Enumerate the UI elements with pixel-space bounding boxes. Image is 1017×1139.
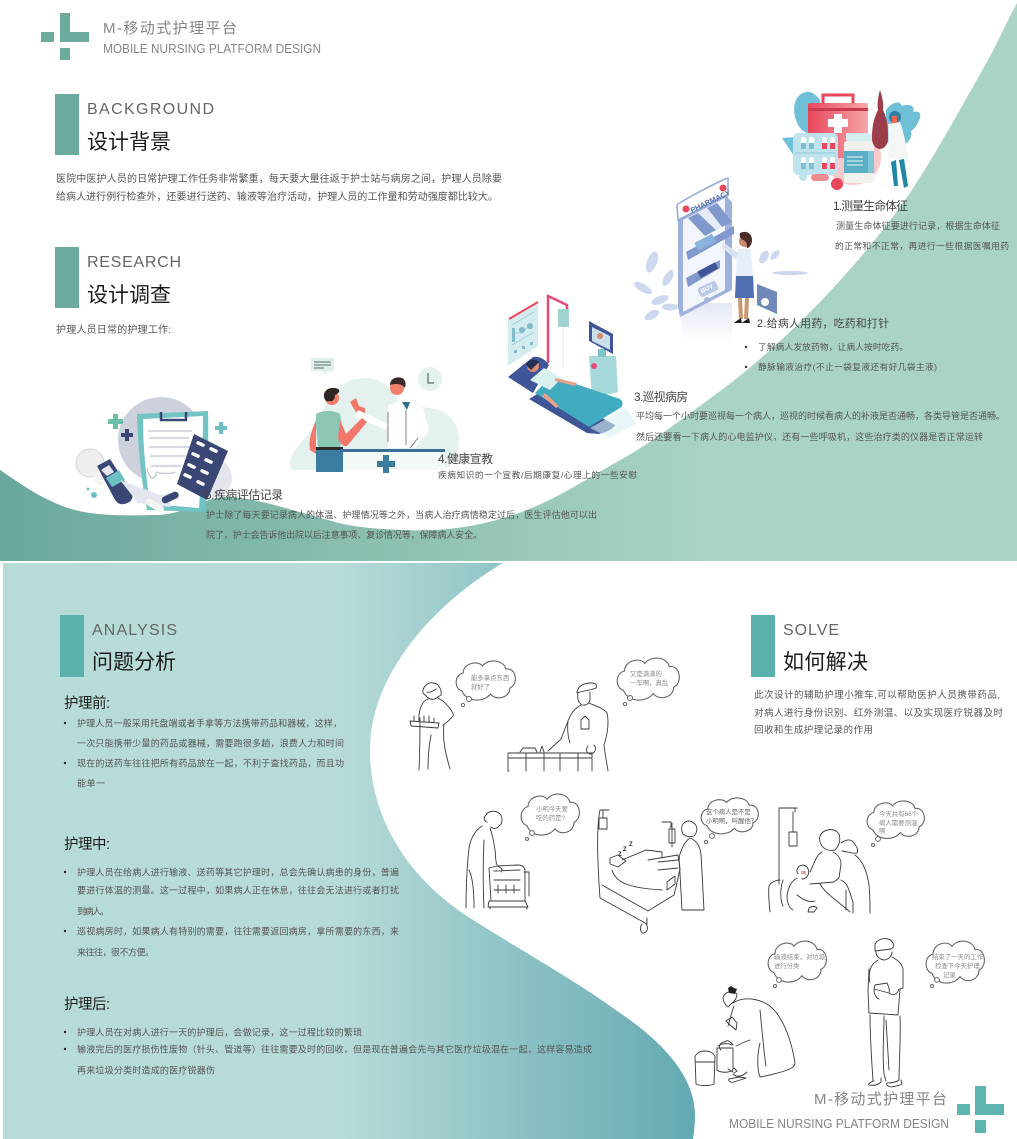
sketch: nurse with sleeping patient [598, 798, 758, 933]
sketch: nurse with cart: 又是满满的 [630, 669, 662, 678]
text block: during nursing: 要进行体温的测量。这一过程中，如果病人正在休息，往往会无法进行或者打扰 [77, 884, 399, 896]
text block: step 3 ward rounds [634, 390, 1005, 442]
text block: during nursing: 巡视病房时，如果病人有特别的需要，往往需要返回病房，拿所需要的东西，来 [77, 926, 399, 936]
sketch: nurse with cart: 一车啊，真乱 [630, 678, 669, 687]
heading: background: 设计背景 [87, 131, 171, 154]
text block: before nursing: 护理前: [64, 695, 110, 712]
text block: step 5 assessment record: 院了，护士会告诉他出院以后注意事项、复诊情况等，保障病人安全。 [206, 529, 482, 540]
text block: step 1 vital signs: 测量生命体征要进行记录，根据生命体征 [836, 220, 1000, 231]
heading: solve [751, 615, 868, 677]
text block: after nursing: 再来垃圾分类时造成的医疗锐器伤 [77, 1064, 215, 1076]
icon: hospital bed robot illustration [508, 296, 636, 438]
text block: before nursing: 现在的送药车往往把所有药品放在一起，不利于查找药品，而且功 [77, 758, 344, 768]
sketch: nurse writing record: 检查下今天护理 [935, 961, 980, 970]
text block: after nursing: 护理后: [64, 996, 110, 1013]
text block: step 1 vital signs [833, 199, 1009, 251]
heading: background: BACKGROUND [87, 101, 214, 118]
text block: solve description: 回收和生成护理记录的作用 [754, 724, 873, 736]
icon: clipboard and medicine illustration [76, 397, 232, 513]
logo: top header [41, 13, 321, 60]
text block: step 5 assessment record: 5.疾病评估记录 [205, 488, 283, 502]
icon: medical kit illustration [782, 90, 920, 190]
logo: bottom footer [729, 1086, 1004, 1133]
sketch: nurse preparing medicine: 吃的药是? [536, 813, 566, 822]
text block: after nursing [64, 996, 592, 1076]
icon: pharmacy phone illustration: BUY [700, 284, 714, 295]
sketch: nurse writing record: 记录 [943, 971, 956, 979]
logo: top header: MOBILE NURSING PLATFORM DESIGN [103, 41, 321, 56]
text block: step 3 ward rounds: 然后还要看一下病人的心电监护仪，还有一些呼吸机，这些治疗类的仪器是否正常运转 [636, 431, 983, 442]
sketch: nurse sorting waste: 输液结束，对垃圾 [774, 952, 826, 961]
text block: step 5 assessment record [205, 488, 597, 540]
text block: during nursing: 来往往，很不方便。 [77, 946, 154, 958]
sketch: nurse with cart [508, 658, 679, 771]
sketch: nurse taking temperature [769, 801, 924, 913]
heading: research [55, 247, 181, 308]
text block: before nursing: 一次只能携带少量的药品或器械，需要跑很多趟，浪费人力和时间 [77, 738, 344, 748]
sketch: nurse with tray [410, 661, 515, 770]
text block: during nursing: 护理人员在给病人进行输液、送药等其它护理时，总会先确认病患的身份，普遍 [77, 866, 399, 878]
logo: bottom footer: M-移动式护理平台 [814, 1091, 947, 1108]
text block: background description: 给病人进行例行检查外，还要进行送药、输液等治疗活动，护理人员的工作量和劳动强度都比较大。 [56, 190, 498, 203]
sketch: nurse taking temperature: 病人需要测温 [879, 818, 918, 827]
text block: step 4 health education: 4.健康宣教 [438, 452, 493, 466]
heading: analysis: 问题分析 [92, 651, 176, 674]
text block: after nursing: 护理人员在对病人进行一天的护理后，会做记录，这一过程比较的繁琐 [77, 1026, 362, 1038]
text block: before nursing [64, 695, 344, 788]
heading: solve: SOLVE [783, 622, 839, 639]
heading: analysis: ANALYSIS [92, 622, 177, 639]
panel: bottom background shape [3, 563, 695, 1139]
text block: before nursing: 护理人员一般采用托盘端或者手拿等方法携带药品和器械，这样， [77, 718, 342, 728]
text block: step 4 health education: 疾病知识的一个宣教/后期康复/心理上的一些安慰 [438, 469, 637, 480]
text block: step 2 medication: 2.给病人用药，吃药和打针 [757, 316, 889, 330]
text block: during nursing [64, 836, 399, 958]
text block: during nursing: 到病人。 [77, 906, 109, 916]
text block: step 1 vital signs: 1.测量生命体征 [833, 199, 908, 213]
logo: top header: M-移动式护理平台 [103, 20, 237, 37]
sketch: nurse taking temperature: 今天共有66个 [879, 809, 919, 818]
text block: solve description: 此次设计的辅助护理小推车,可以帮助医护人员携带药品, [754, 689, 1000, 701]
text block: step 2 medication: 静脉输液治疗(不止一袋复液还有好几袋主液) [758, 361, 937, 372]
icon: pharmacy phone illustration: PHARMACY [689, 188, 732, 215]
text block: after nursing: 输液完后的医疗损伤性废物（针头、管道等）往往需要及时的回收，但是现在普遍会先与其它医疗垃圾混在一起，这样容易造成 [77, 1044, 592, 1054]
sketch: nurse writing record: 结束了一天的工作 [932, 952, 984, 961]
heading: background [55, 94, 214, 155]
sketch: nurse with sleeping patient: Z [618, 852, 622, 858]
sketch: nurse preparing medicine [466, 794, 579, 909]
text block: background description [56, 172, 502, 203]
sketch: nurse taking temperature: 啊 [879, 827, 886, 835]
sketch: nurse with sleeping patient: Z [623, 847, 627, 853]
text block: research intro: 护理人员日常的护理工作: [56, 323, 171, 336]
text block: solve description [754, 689, 1003, 736]
text block: step 4 health education [438, 452, 637, 480]
heading: solve: 如何解决 [783, 651, 868, 674]
sketch: nurse with sleeping patient: Z [629, 842, 633, 848]
text block: during nursing: 护理中: [64, 836, 110, 853]
icon: pharmacy phone illustration [632, 178, 808, 343]
heading: research: RESEARCH [87, 254, 181, 271]
text block: solve description: 对病人进行身份识别、红外测温、以及实现医疗锐器及时 [754, 707, 1003, 719]
sketch: nurse writing record [868, 939, 984, 1087]
sketch: nurse with tray: 能多拿点东西 [471, 673, 509, 682]
text block: step 2 medication: 了解病人发放药物，让病人按时吃药。 [758, 341, 908, 352]
text block: step 2 medication [745, 316, 937, 372]
sketch: nurse sorting waste: 进行分类 [774, 961, 800, 970]
text block: before nursing: 能单一 [77, 778, 105, 788]
sketch: nurse with tray: 就好了 [471, 682, 490, 691]
text block: step 1 vital signs: 的正常和不正常，再进行一些根据医嘱用药 [835, 240, 1009, 251]
sketch: nurse with sleeping patient: 这个病人是不是 [706, 807, 751, 816]
text block: background description: 医院中医护人员的日常护理工作任务非常繁重，每天要大量往返于护士站与病房之间，护理人员除要 [56, 172, 502, 185]
text block: step 3 ward rounds: 3.巡视病房 [634, 390, 688, 404]
text block: step 3 ward rounds: 平均每一个小时要巡视每一个病人，巡视的时候看病人的补液是否通畅，各类导管是否通畅。 [636, 410, 1005, 421]
logo: bottom footer: MOBILE NURSING PLATFORM DESIGN [729, 1116, 949, 1131]
sketch: nurse preparing medicine: 小明今天要 [536, 804, 569, 813]
heading: research: 设计调查 [87, 284, 171, 307]
heading: analysis [60, 615, 177, 677]
sketch: nurse with sleeping patient: 小明啊，叫醒他？ [706, 816, 757, 825]
icon: doctor consultation illustration [290, 358, 459, 473]
text block: step 5 assessment record: 护士除了每天要记录病人的体温、护理情况等之外，当病人治疗病情稳定过后，医生评估他可以出 [206, 509, 597, 520]
sketch: nurse sorting waste [695, 941, 826, 1086]
panel: top background wave [0, 3, 1017, 561]
